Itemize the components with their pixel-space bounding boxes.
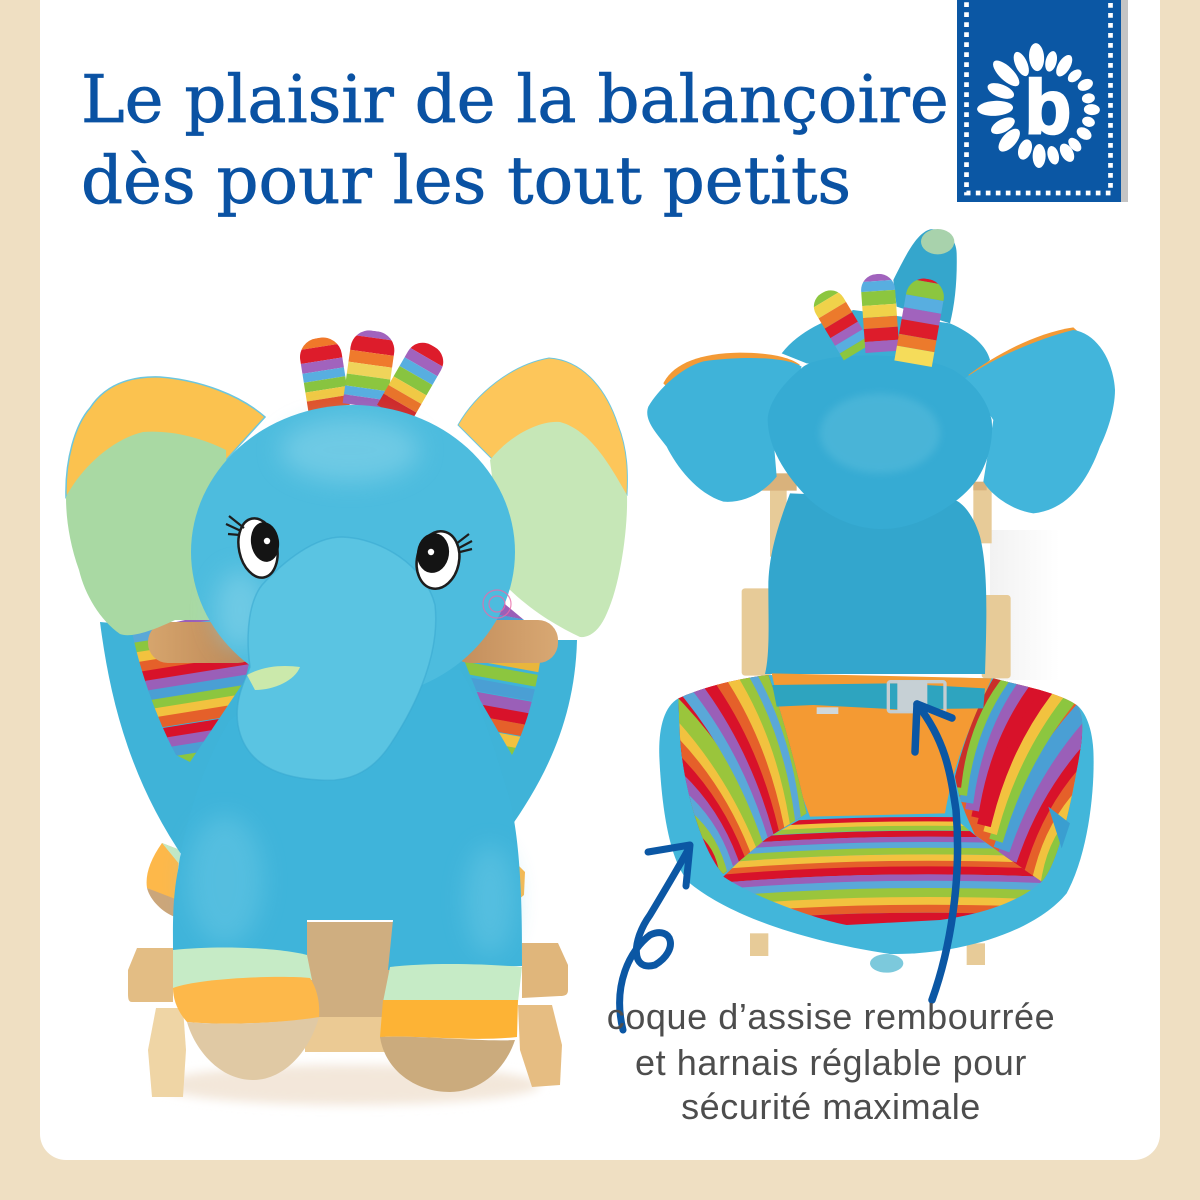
title: dès pour les tout petits (81, 143, 851, 219)
caption: coque d’assise rembourrée (607, 996, 1055, 1037)
right ear (458, 358, 627, 637)
left ear orange rim (663, 353, 800, 393)
harness buckle (817, 681, 945, 714)
title (81, 62, 949, 219)
wooden rocker base (128, 922, 568, 1097)
arrow: to harness (915, 704, 958, 1000)
rainbow tufts: right (894, 278, 944, 367)
trunk tip (921, 229, 954, 254)
upper view: plush back in zoom coordinates (647, 229, 1115, 678)
arrow: to padded shell (620, 845, 690, 1030)
eyes (226, 515, 472, 593)
harness strap (772, 683, 985, 709)
front view elephant rocker (66, 328, 627, 1105)
body (173, 670, 522, 975)
rear feet peeking out (147, 843, 525, 917)
wooden back frame (742, 473, 1011, 678)
wooden legs (750, 933, 985, 965)
brand logo badge (957, 0, 1128, 202)
body light patches (187, 815, 515, 955)
back of head dome (782, 310, 990, 380)
rainbow tufts: middle (342, 330, 394, 408)
caption: sécurité maximale (681, 1086, 981, 1127)
soft shadow behind (990, 530, 1060, 680)
wooden handle bar (148, 620, 558, 663)
left rainbow side (678, 675, 807, 874)
rainbow seat cushion (707, 819, 1057, 928)
lower view: seat in zoom coordinates (659, 670, 1094, 973)
seat shell wings (100, 622, 577, 860)
left ear (66, 377, 265, 635)
rocker shadow (160, 1065, 540, 1105)
right ear orange rim (968, 327, 1080, 380)
trunk tip patch (247, 666, 300, 690)
trunk (237, 537, 436, 780)
left rainbow side (132, 620, 249, 762)
rainbow tufts: left (814, 290, 870, 360)
seat shell (659, 675, 1094, 954)
caption (607, 996, 1055, 1127)
head light patches (215, 418, 420, 650)
left ear (647, 358, 802, 502)
plush tail (870, 954, 903, 973)
right rainbow side (464, 604, 540, 755)
caption: et harnais réglable pour (635, 1042, 1027, 1083)
rainbow tufts: middle (861, 274, 898, 353)
rainbow tufts: left (300, 338, 350, 411)
head lobe (768, 355, 992, 529)
blue tag (1048, 807, 1070, 848)
title: Le plaisir de la balançoire (81, 62, 949, 138)
feet stripes (173, 948, 522, 1092)
pink cheek swirl (483, 590, 511, 618)
body back (765, 493, 986, 674)
orange seat back (772, 673, 992, 817)
head (191, 405, 515, 699)
right ear (965, 330, 1115, 513)
rainbow tufts: right (377, 342, 444, 416)
lobe light patch (820, 393, 940, 473)
right rainbow side (955, 678, 1082, 882)
icon: flower logo: b (1025, 65, 1071, 150)
back view elephant rocker (647, 229, 1115, 973)
trunk rising (893, 229, 957, 323)
icon: flower logo (977, 43, 1100, 168)
